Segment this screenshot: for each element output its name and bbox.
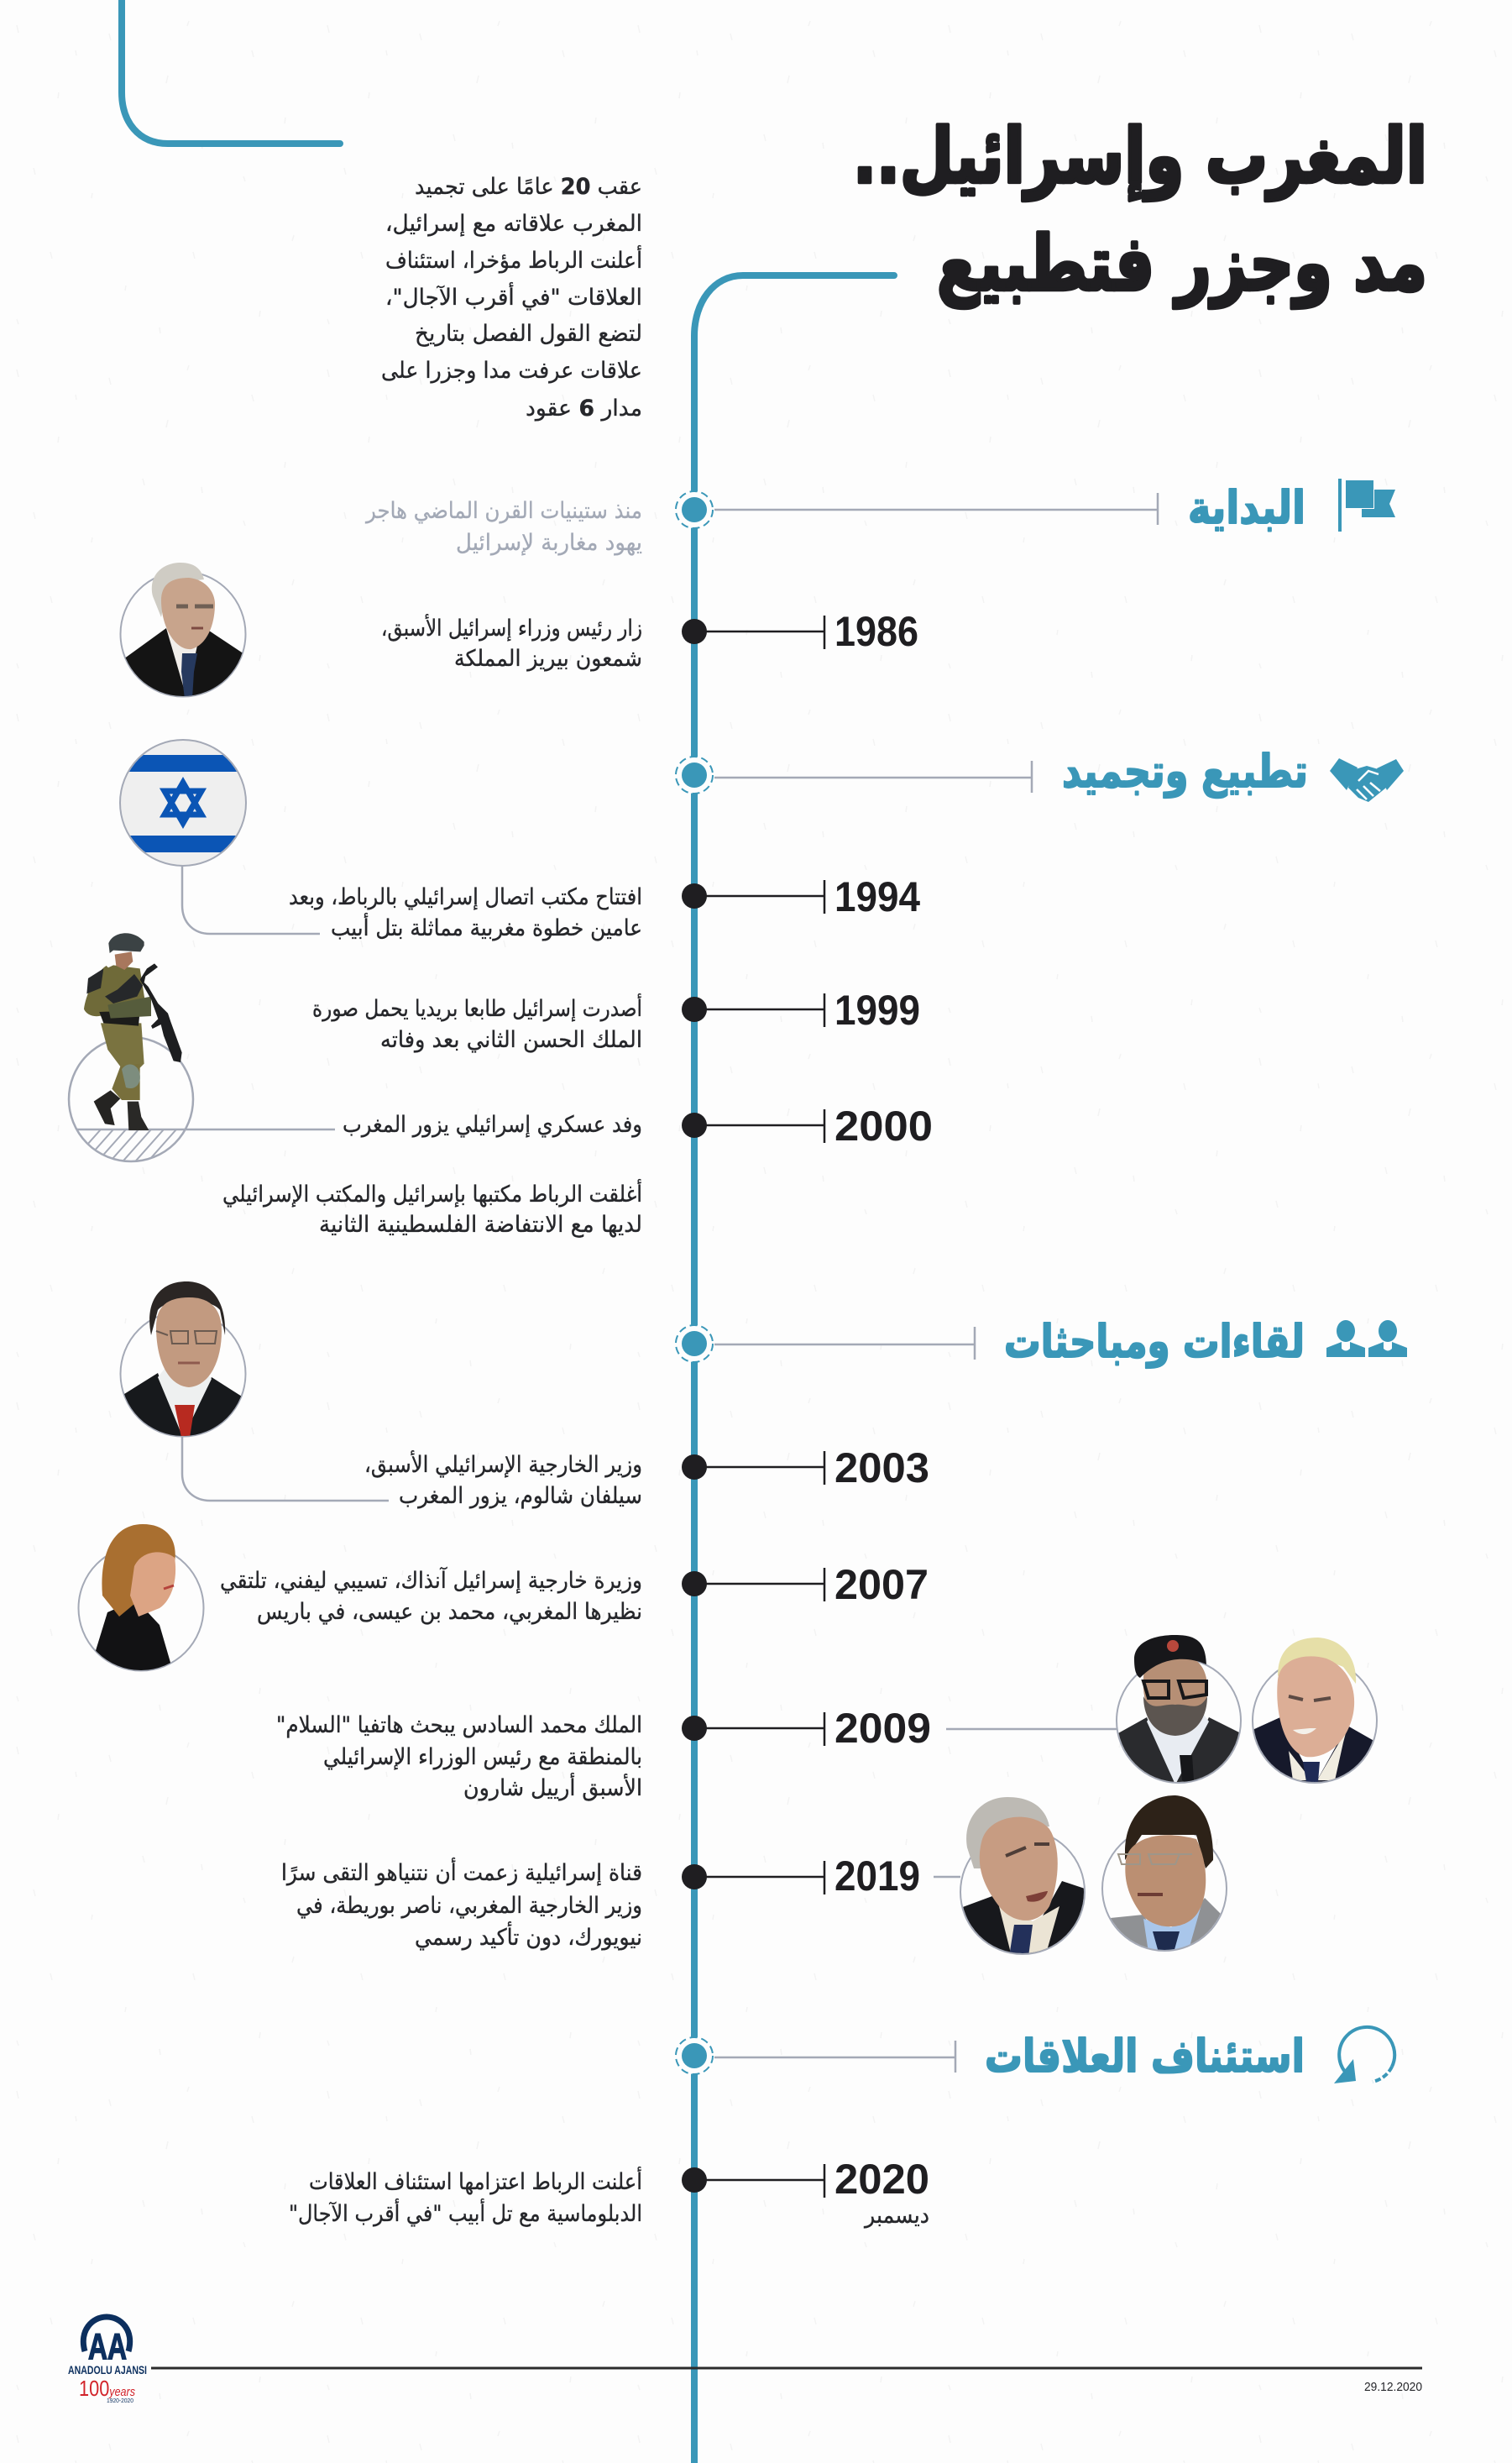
year 2000: وفد عسكري إسرائيلي يزور المغرب	[343, 1112, 642, 1138]
year 2019	[281, 1852, 920, 1951]
node and connector	[682, 993, 824, 1027]
intro text: المغرب علاقاته مع إسرائيل،	[385, 211, 642, 237]
year 2009: 2009	[834, 1705, 931, 1752]
year 2000: لديها مع الانتفاضة الفلسطينية الثانية	[319, 1212, 642, 1238]
year 1999	[312, 987, 920, 1053]
years range: 1920-2020	[107, 2398, 133, 2404]
hatched ground	[87, 1130, 176, 1161]
node and connector	[682, 1712, 824, 1746]
portrait: Silvan Shalom	[118, 1281, 249, 1444]
early emigration text: يهود مغاربة لإسرائيل	[456, 530, 642, 556]
portrait: Ariel Sharon	[1253, 1638, 1377, 1789]
portrait: Benjamin Netanyahu	[960, 1797, 1087, 1961]
connector to 2009 portraits	[946, 1728, 1117, 1730]
early emigration text	[364, 498, 642, 556]
year 2020: الدبلوماسية مع تل أبيب "في أقرب الآجال"	[289, 2198, 642, 2227]
year 2020: أعلنت الرباط اعتزامها استئناف العلاقات	[309, 2166, 642, 2195]
year 2007: وزيرة خارجية إسرائيل آنذاك، تسيبي ليفني، تلتقي	[220, 1567, 642, 1594]
intro text: علاقات عرفت مدا وجزرا على	[381, 358, 642, 384]
year 2019: وزير الخارجية المغربي، ناصر بوريطة، في	[296, 1893, 642, 1919]
date: 29.12.2020	[1364, 2380, 1422, 2394]
100 years: 100years	[79, 2376, 135, 2401]
connector to 2019 portraits	[934, 1876, 960, 1878]
year 2000: أغلقت الرباط مكتبها بإسرائيل والمكتب الإسرائيلي	[222, 1178, 642, 1208]
year 2009: الأسبق أرييل شارون	[463, 1772, 642, 1801]
year 1999: 1999	[834, 987, 920, 1034]
year 1986: زار رئيس وزراء إسرائيل الأسبق،	[381, 613, 642, 642]
timeline axis	[694, 275, 894, 2463]
agency name: ANADOLU AJANSI	[68, 2363, 147, 2377]
section node	[676, 2037, 713, 2074]
portrait: Tzipi Livni	[79, 1524, 203, 1680]
connector	[714, 2041, 955, 2073]
logo: Anadolu Agency	[68, 2317, 147, 2404]
node and connector	[682, 1451, 824, 1485]
year 2019: نيويورك، دون تأكيد رسمي	[415, 1921, 642, 1951]
node and connector	[682, 1109, 824, 1143]
year 2020: 2020	[834, 2156, 929, 2203]
year 2020	[289, 2156, 929, 2229]
icon: handshake	[1330, 758, 1404, 802]
intro text: عقب 20 عامًا على تجميد	[415, 174, 642, 200]
section: normalisation and freezing	[676, 745, 1404, 802]
year 2019: 2019	[834, 1852, 920, 1900]
soldier with circle	[67, 933, 335, 1167]
title	[853, 113, 1427, 309]
section: resuming relations	[676, 2027, 1394, 2083]
heading: لقاءات ومباحثات	[1004, 1315, 1305, 1368]
section: meetings and talks	[676, 1315, 1407, 1368]
year 2009: الملك محمد السادس يبحث هاتفيا "السلام"	[276, 1712, 642, 1738]
year 1999: أصدرت إسرائيل طابعا بريديا يحمل صورة	[312, 993, 642, 1022]
section node	[676, 1325, 713, 1362]
AA letters: AA	[88, 2326, 127, 2367]
intro text: مدار 6 عقود	[526, 396, 642, 422]
section node	[676, 757, 713, 794]
portrait: King Mohammed VI	[1117, 1635, 1243, 1789]
icon: circular arrow	[1334, 2027, 1394, 2083]
intro text: العلاقات "في أقرب الآجال"،	[385, 281, 642, 311]
intro text	[381, 174, 642, 422]
year 1994: 1994	[834, 873, 920, 920]
icon: flag	[1338, 479, 1395, 532]
section: beginning	[676, 479, 1395, 534]
intro text: لتضع القول الفصل بتاريخ	[415, 321, 642, 347]
star of David	[165, 783, 201, 823]
connector	[714, 761, 1032, 793]
year 1986	[381, 608, 918, 672]
year 1994: عامين خطوة مغربية مماثلة بتل أبيب	[331, 912, 642, 941]
connector	[714, 493, 1158, 525]
node and connector	[682, 2164, 824, 2198]
year 2007: 2007	[834, 1561, 929, 1608]
year 2003: 2003	[834, 1444, 929, 1491]
year 2007	[220, 1561, 929, 1625]
early emigration text: منذ ستينيات القرن الماضي هاجر	[364, 498, 642, 524]
portrait: Shimon Peres	[119, 563, 247, 697]
leader from Shalom portrait	[182, 1437, 389, 1501]
year 2009	[276, 1705, 931, 1801]
year 2009: بالمنطقة مع رئيس الوزراء الإسرائيلي	[323, 1744, 642, 1770]
heading: البداية	[1188, 481, 1305, 534]
year 2003: وزير الخارجية الإسرائيلي الأسبق،	[364, 1449, 642, 1478]
year 2003	[364, 1444, 929, 1509]
heading: استئناف العلاقات	[985, 2030, 1305, 2083]
year 2007: نظيرها المغربي، محمد بن عيسى، في باريس	[257, 1599, 642, 1625]
year 2000	[222, 1103, 933, 1238]
leader from flag	[182, 866, 320, 934]
node and connector	[682, 1861, 824, 1894]
flag of Israel	[118, 740, 252, 866]
year 1986: 1986	[834, 608, 918, 655]
section node	[676, 491, 713, 528]
heading: تطبيع وتجميد	[1062, 745, 1308, 798]
year 2003: سيلفان شالوم، يزور المغرب	[399, 1483, 642, 1509]
top left corner line	[122, 0, 340, 144]
connector	[714, 1327, 975, 1360]
year 2019: قناة إسرائيلية زعمت أن نتنياهو التقى سرًا	[281, 1857, 642, 1886]
year 2000: 2000	[834, 1103, 933, 1150]
footer rule	[151, 2366, 1422, 2370]
year 1986: شمعون بيريز المملكة	[454, 646, 642, 672]
node and connector	[682, 616, 824, 649]
portrait: Nasser Bourita	[1102, 1795, 1230, 1957]
arc mark	[83, 2317, 130, 2351]
icon: two people	[1326, 1320, 1407, 1357]
year 2020: ديسمبر	[863, 2203, 929, 2229]
year 1994	[289, 873, 920, 941]
intro text: أعلنت الرباط مؤخرا، استئناف	[385, 244, 642, 274]
node and connector	[682, 1568, 824, 1601]
year 1999: الملك الحسن الثاني بعد وفاته	[380, 1027, 642, 1053]
node and connector	[682, 880, 824, 914]
year 1994: افتتاح مكتب اتصال إسرائيلي بالرباط، وبعد	[289, 884, 642, 910]
